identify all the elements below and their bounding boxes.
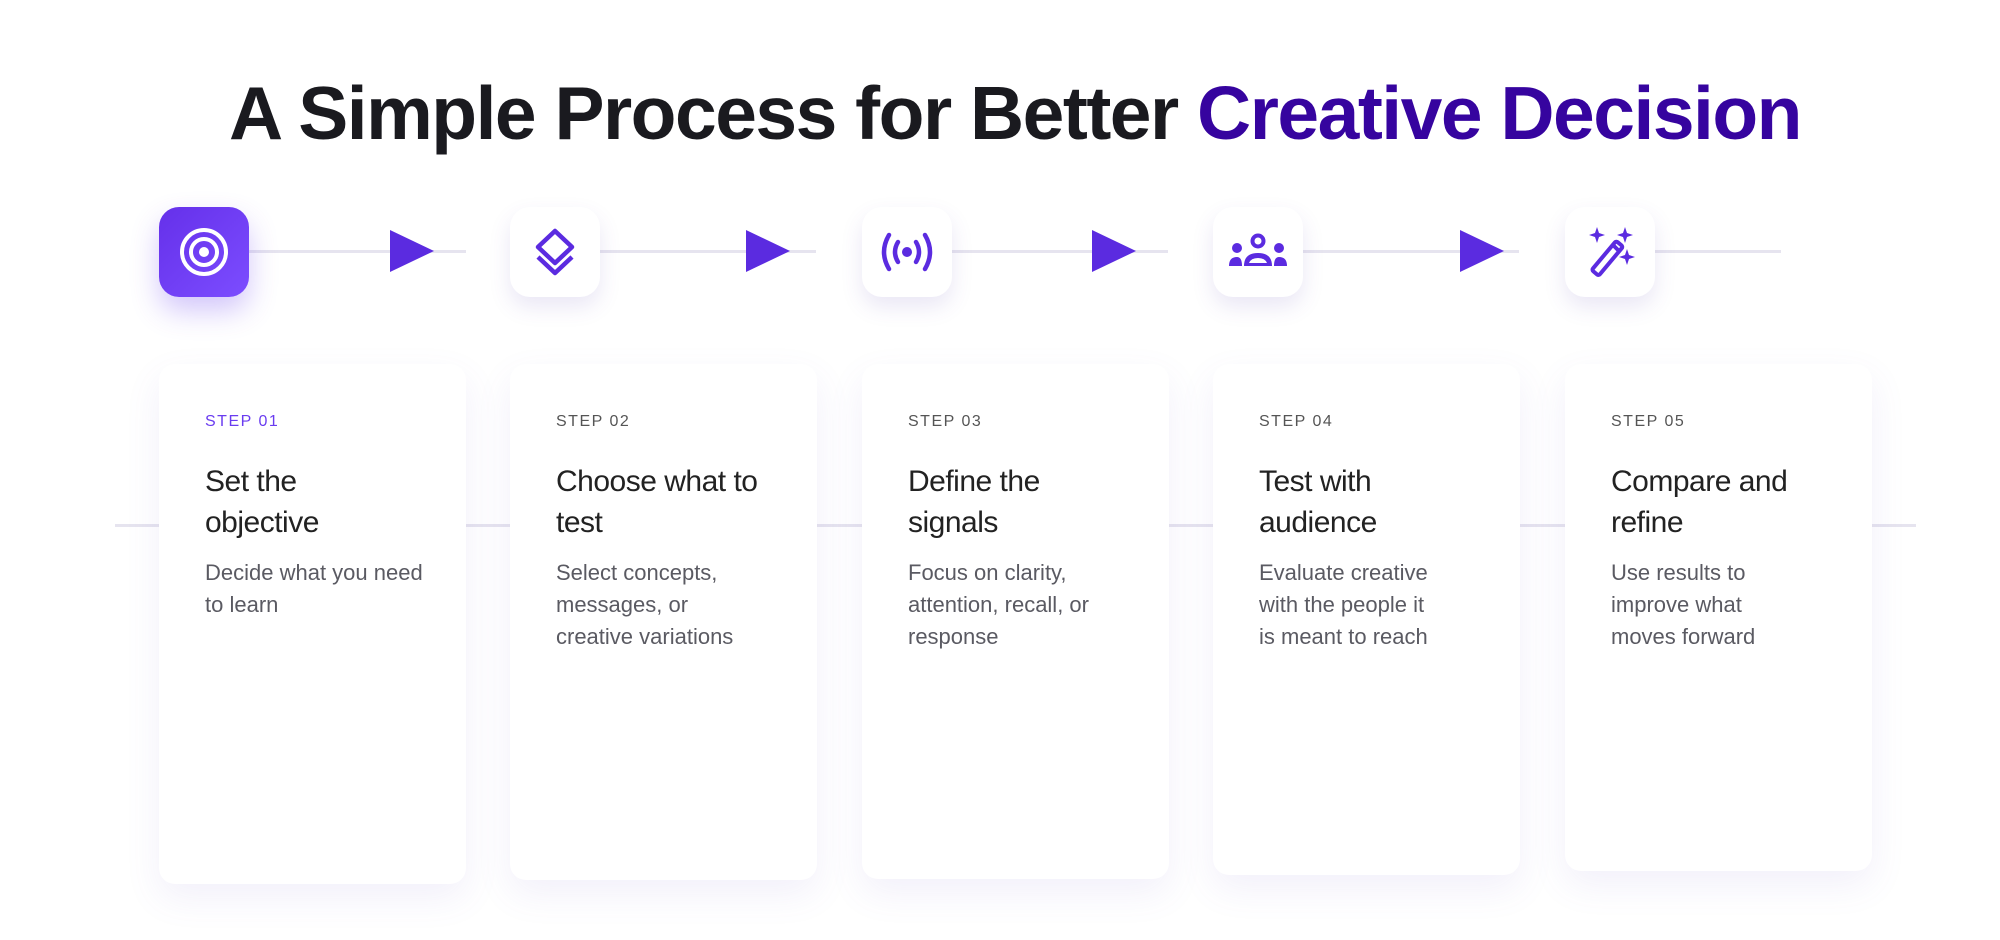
card 4: STEP 04 <box>1259 413 1333 430</box>
card 5: moves forward <box>1611 624 1755 649</box>
card 1 <box>159 364 466 884</box>
arrow 3 <box>1092 230 1136 272</box>
arrow 4 <box>1460 230 1504 272</box>
title: A Simple Process for Better Creative Decision <box>229 71 1801 155</box>
icon: layers <box>510 207 600 297</box>
card 4: audience <box>1259 506 1377 539</box>
card 2 <box>510 364 817 880</box>
card 5: improve what <box>1611 592 1742 617</box>
card 2: Select concepts, <box>556 560 717 585</box>
card 2: messages, or <box>556 592 688 617</box>
icon: magic wand <box>1565 207 1655 297</box>
icon: group <box>1213 207 1303 297</box>
card 5: STEP 05 <box>1611 413 1685 430</box>
card 3: response <box>908 624 999 649</box>
card 3 <box>862 364 1169 879</box>
icon: target <box>159 207 249 297</box>
card 4 <box>1213 364 1520 875</box>
card 4: is meant to reach <box>1259 624 1428 649</box>
card 5: Use results to <box>1611 560 1746 585</box>
card 1: Decide what you need <box>205 560 423 585</box>
card 5 <box>1565 364 1872 871</box>
card 5: refine <box>1611 506 1683 539</box>
card 2: STEP 02 <box>556 413 630 430</box>
card 1: objective <box>205 506 319 539</box>
card 2: test <box>556 506 602 539</box>
card 3: attention, recall, or <box>908 592 1089 617</box>
card 3: Focus on clarity, <box>908 560 1067 585</box>
arrow 2 <box>746 230 790 272</box>
card 3: STEP 03 <box>908 413 982 430</box>
card 3: Define the <box>908 465 1040 498</box>
card 4: with the people it <box>1259 592 1424 617</box>
card 2: Choose what to <box>556 465 757 498</box>
card 1: to learn <box>205 592 278 617</box>
card 5: Compare and <box>1611 465 1787 498</box>
card 2: creative variations <box>556 624 733 649</box>
card 1: STEP 01 <box>205 413 279 430</box>
card 1: Set the <box>205 465 297 498</box>
icon: signal <box>862 207 952 297</box>
card 3: signals <box>908 506 998 539</box>
card 4: Evaluate creative <box>1259 560 1428 585</box>
card 4: Test with <box>1259 465 1371 498</box>
arrow 1 <box>390 230 434 272</box>
